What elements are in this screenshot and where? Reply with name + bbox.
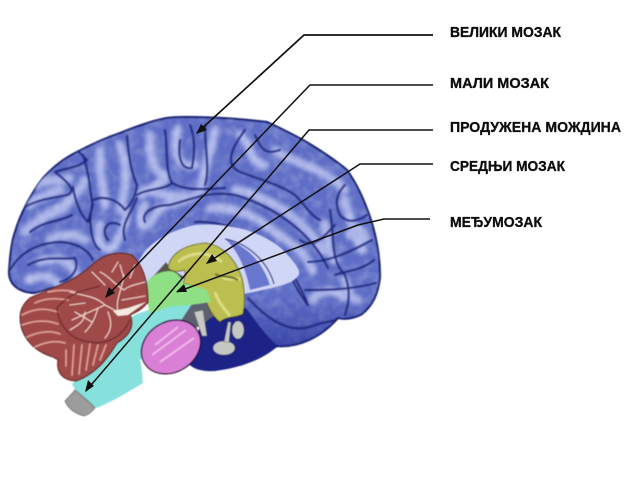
leader: ВЕЛИКИ МОЗАК (196, 35, 433, 134)
brainstem (cyan) (72, 304, 192, 408)
leader: СРЕДЊИ МОЗАК (206, 164, 433, 264)
grey structures (194, 310, 244, 355)
label: medulla: ПРОДУЖЕНА МОЖДИНА (450, 120, 622, 136)
cerebellum (20, 253, 148, 381)
arbor vitae (70, 262, 145, 338)
label: cerebrum: ВЕЛИКИ МОЗАК (450, 25, 561, 41)
label: cerebellum: МАЛИ МОЗАК (450, 76, 549, 92)
pons (pink ellipse) (131, 309, 211, 385)
hypothalamus (dark blue) (186, 308, 278, 371)
midbrain (green) (146, 271, 211, 314)
grey tissue behind brainstem (172, 298, 218, 332)
brain infographic (7, 26, 621, 417)
leader: ПРОДУЖЕНА МОЖДИНА (85, 130, 433, 392)
label: diencephalon: МЕЂУМОЗАК (450, 215, 542, 231)
sulci (10, 125, 376, 328)
leader: МЕЂУМОЗАК (176, 219, 430, 292)
corpus callosum (pale arc) (136, 224, 299, 294)
label: midbrain: СРЕДЊИ МОЗАК (450, 159, 565, 175)
spinal cord stub (grey) (65, 390, 95, 416)
diencephalon (yellow) (168, 243, 244, 322)
inner blue fold (225, 239, 270, 290)
folia stripes (22, 290, 106, 375)
cerebrum (0, 110, 390, 350)
gyri highlights (25, 130, 365, 300)
leader: МАЛИ МОЗАК (105, 85, 433, 298)
